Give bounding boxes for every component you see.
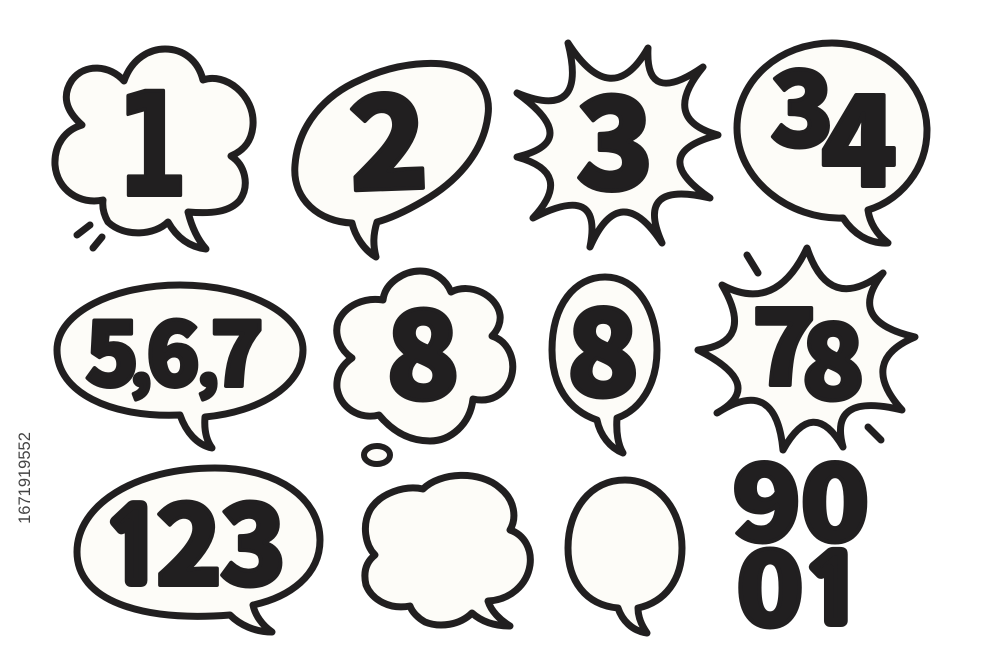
bubble: burst with 78 — [698, 248, 915, 450]
bubble: thought cloud with 8: 8 — [386, 258, 460, 435]
bubble: oval with 5,6,7: 6 — [146, 285, 200, 412]
bubble: thought cloud with 8 — [337, 258, 513, 464]
bubble: oval with 123: 3 — [220, 457, 286, 617]
bubble: narrow oval with 8: 8 — [566, 257, 640, 431]
bubble: round with 34: 4 — [821, 41, 897, 222]
bubble: oval with 5,6,7: , — [130, 317, 152, 404]
bubble: oval with 2 — [295, 38, 488, 257]
empty bubble: narrow oval — [568, 480, 682, 633]
numbers: 01: 0 — [736, 508, 804, 655]
bubble: oval with 123: 1 — [104, 497, 164, 597]
bubble: burst with 3 — [517, 41, 718, 247]
bubble: oval with 2: 2 — [345, 38, 431, 228]
bubble: cloud with 1: 1 — [116, 63, 188, 229]
bubble: round with 34: 3 — [770, 25, 834, 176]
numbers: 90: 90 — [732, 421, 870, 571]
bubble: burst with 3: 3 — [576, 41, 654, 226]
numbers: 01: 1 — [803, 543, 864, 635]
bubble: narrow oval with 8 — [552, 257, 657, 453]
bubble: burst with 78: 7 — [752, 262, 816, 416]
bubble: burst with 78: 8 — [801, 278, 865, 429]
bubble: cloud with 1 — [55, 49, 253, 249]
bubble: oval with 123 — [77, 457, 320, 632]
bubble: oval with 5,6,7: , — [197, 317, 219, 404]
bubble: oval with 5,6,7 — [57, 285, 303, 448]
bubble: oval with 5,6,7: 7 — [210, 285, 264, 412]
empty bubble: cloud — [365, 475, 530, 626]
watermark id: 1671919552 — [16, 432, 34, 524]
bubble: round with 34 — [737, 25, 927, 243]
bubble: oval with 123: 2 — [156, 457, 222, 617]
bubble: oval with 5,6,7: 5 — [85, 285, 139, 412]
